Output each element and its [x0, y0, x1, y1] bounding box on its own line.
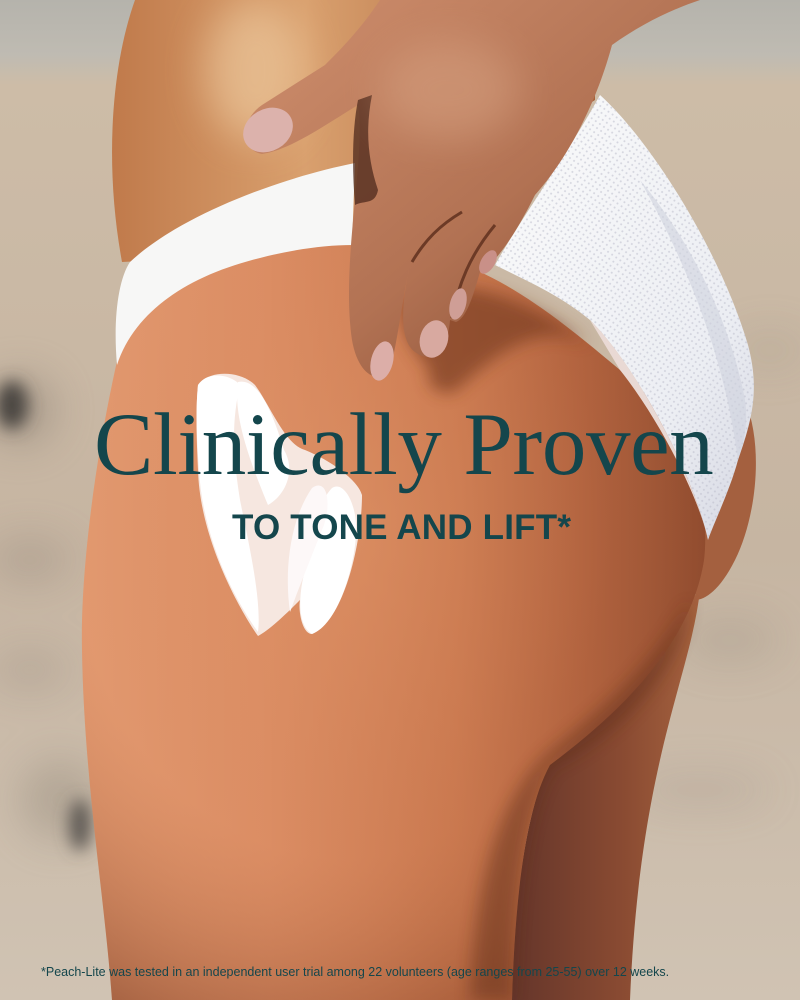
rear leg	[510, 590, 700, 1000]
rear thigh sliver	[695, 400, 756, 600]
torso	[112, 0, 595, 262]
hand shadow on hip	[400, 286, 590, 393]
hand	[235, 0, 700, 383]
waist highlight	[205, 0, 305, 140]
cream swatch	[196, 374, 362, 636]
hip shading	[82, 245, 705, 1000]
thumb nail	[235, 99, 301, 161]
bikini	[116, 95, 754, 540]
footnote: *Peach-Lite was tested in an independent user trial among 22 volunteers (age ranges from 25-55) over 12 weeks.	[41, 965, 669, 979]
hand highlight	[380, 40, 520, 140]
title: Clinically Proven	[94, 396, 713, 494]
underside shadow	[470, 600, 690, 1000]
subtitle: TO TONE AND LIFT*	[232, 508, 571, 547]
finger shadow	[353, 95, 378, 205]
fingernails	[366, 339, 398, 383]
main leg and hip	[82, 245, 705, 1000]
